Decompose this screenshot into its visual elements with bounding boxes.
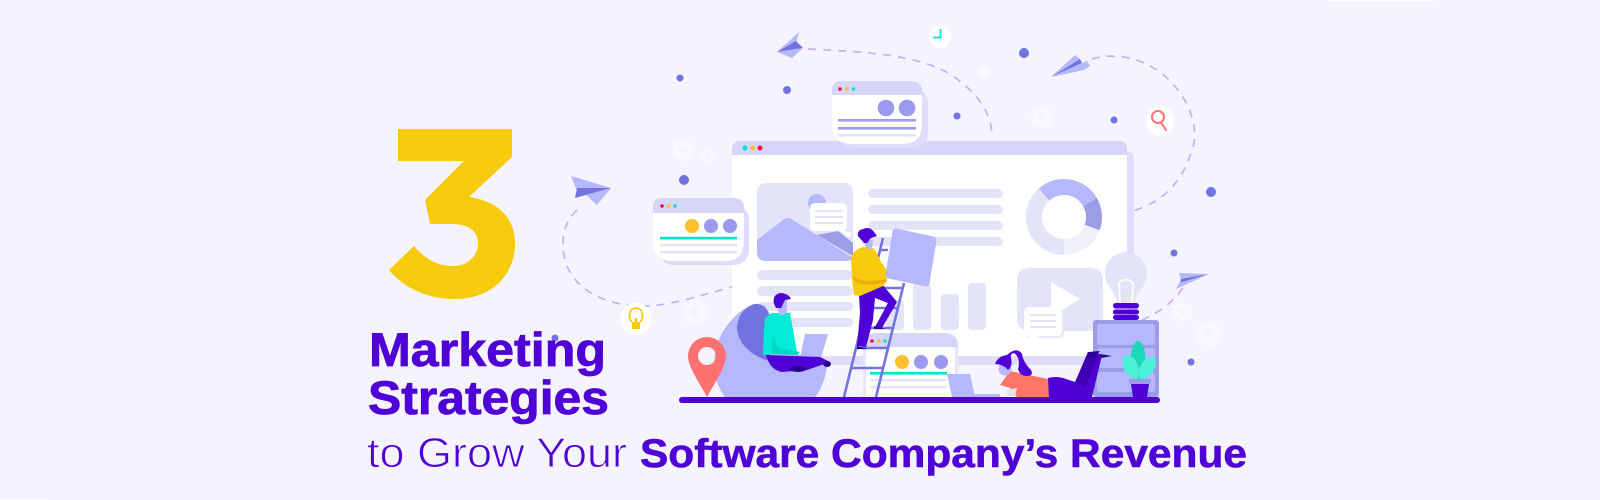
small window top <box>832 81 928 148</box>
scattered dots <box>552 48 1216 366</box>
ground line <box>679 397 1160 403</box>
text lines right <box>868 189 1003 246</box>
small window left <box>653 198 749 265</box>
ladder <box>844 238 904 397</box>
board carried by man <box>889 232 933 283</box>
text lines left <box>757 270 853 327</box>
laptop <box>800 334 828 358</box>
gears <box>673 68 1222 346</box>
icon: clock <box>929 26 951 48</box>
plant <box>1123 341 1156 397</box>
image placeholder <box>757 183 853 261</box>
icon: big light bulb <box>1105 252 1147 320</box>
big number 3 <box>389 129 515 299</box>
dashed flight paths <box>563 49 1195 320</box>
figure: woman lying with laptop <box>947 350 1112 397</box>
icon: magnifier <box>1146 106 1174 136</box>
heading: Marketing: Marketing <box>369 323 606 376</box>
cabinet <box>1093 320 1159 397</box>
video panel <box>1017 268 1103 342</box>
small window bottom <box>863 333 958 397</box>
bean bag chair <box>714 304 827 397</box>
donut chart <box>1034 187 1094 247</box>
main browser window <box>732 141 1134 365</box>
icon: paper plane top <box>777 32 803 58</box>
bar chart <box>886 283 986 330</box>
icon: light bulb badge <box>620 303 652 335</box>
figure: man in bean bag <box>714 293 831 397</box>
icon: paper plane lower right <box>1176 273 1209 289</box>
icon: paper plane left <box>571 176 611 205</box>
laptop <box>947 374 975 397</box>
heading: Strategies: Strategies <box>368 371 609 424</box>
icon: paper plane right <box>1051 55 1090 77</box>
figure: man on ladder <box>851 228 897 349</box>
icon: map pin <box>688 337 726 397</box>
subtitle: light part: to Grow Your <box>367 429 627 476</box>
subtitle: bold part: Software Company’s Revenue <box>640 432 1247 476</box>
